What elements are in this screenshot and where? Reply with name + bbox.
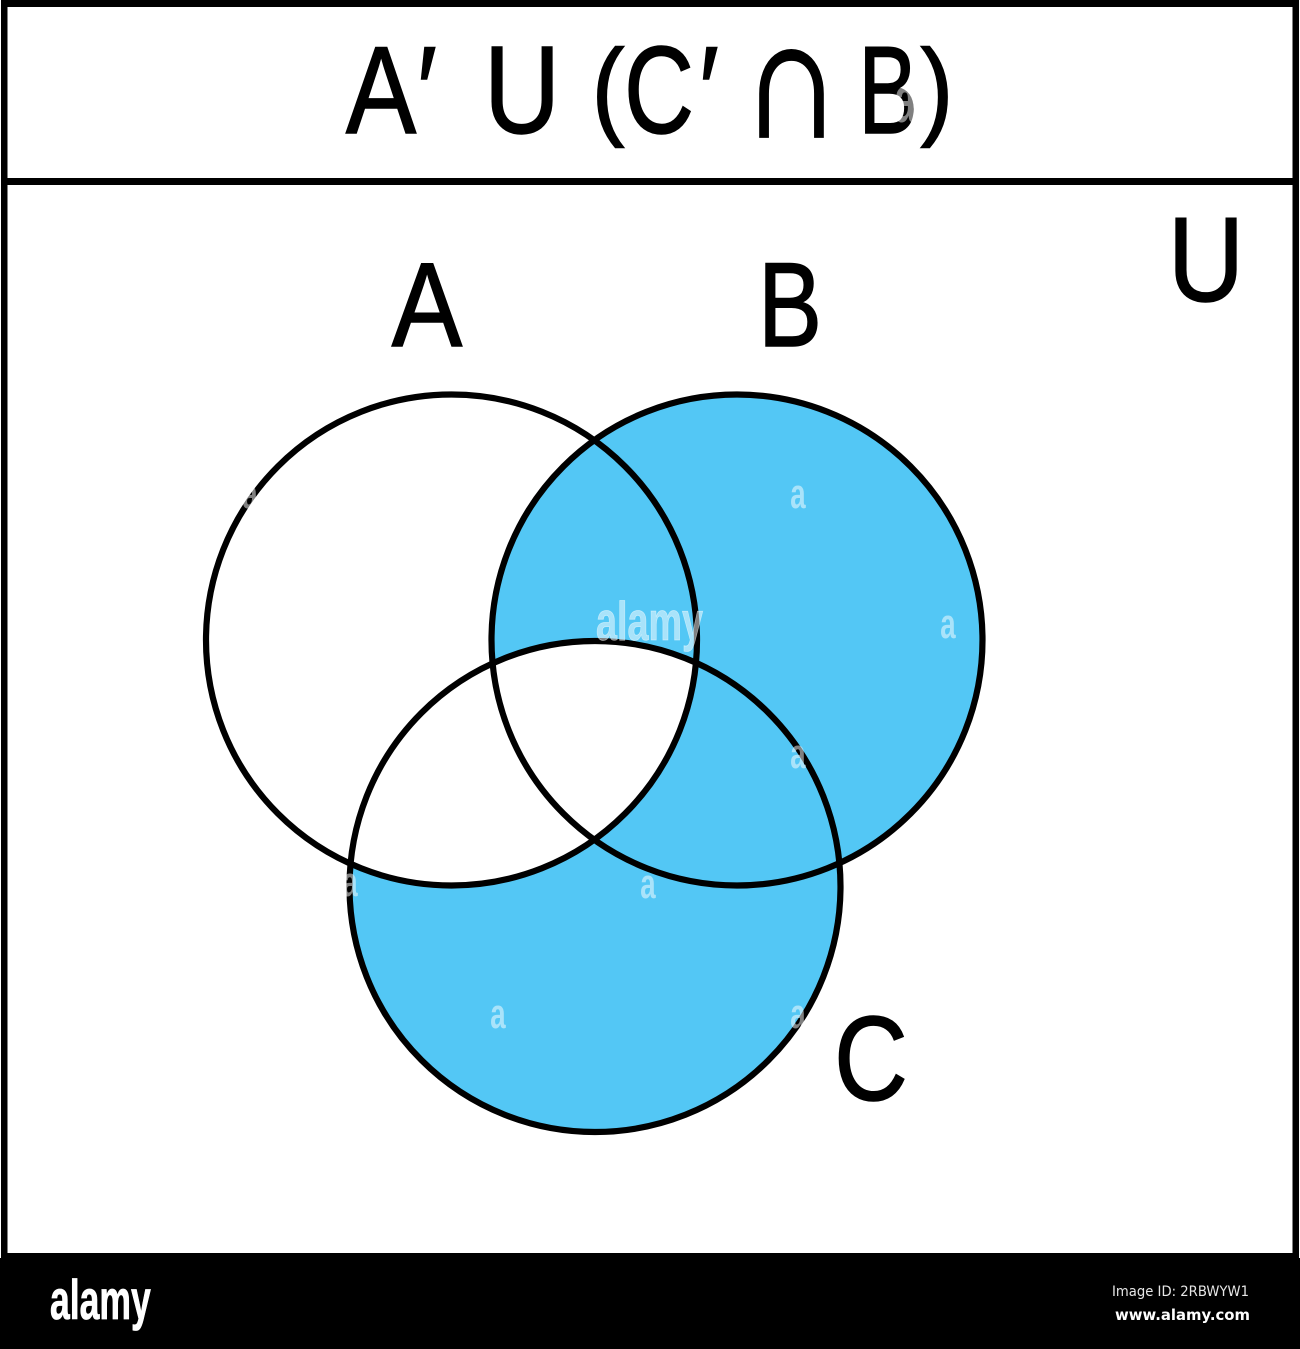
circle outline A — [206, 394, 697, 886]
watermark marks: a — [894, 63, 917, 137]
watermark marks — [242, 63, 957, 1037]
venn diagram — [206, 394, 982, 1132]
set label C: C — [834, 991, 908, 1126]
watermark marks: a — [490, 990, 507, 1037]
shaded region: set B — [492, 394, 982, 886]
title: ) — [921, 26, 953, 148]
website: www.alamy.com — [1115, 1306, 1250, 1324]
watermark marks: a — [242, 470, 259, 517]
circle outline C — [350, 641, 840, 1132]
title: ( — [592, 26, 624, 148]
watermark marks: a — [790, 470, 807, 517]
title: U — [484, 22, 560, 160]
set label A: A — [392, 238, 463, 371]
watermark marks: alamy — [596, 590, 703, 652]
watermark marks: a — [640, 860, 657, 907]
footer bar — [0, 1258, 1300, 1349]
title: B — [858, 21, 918, 159]
title — [346, 0, 953, 172]
unshaded region: A and C overlap — [354, 644, 693, 882]
watermark marks: a — [790, 730, 807, 777]
header divider — [4, 178, 1296, 185]
title: ′ — [699, 22, 719, 160]
footer logo: alamy — [50, 1269, 151, 1331]
circle outline B — [492, 394, 982, 886]
shaded region: set C — [350, 641, 840, 1132]
set label U: U — [1168, 193, 1244, 326]
watermark marks: a — [790, 990, 807, 1037]
title: C — [624, 20, 694, 160]
image id: Image ID: 2RBWYW1 — [1112, 1284, 1249, 1300]
title: ′ — [417, 22, 437, 160]
watermark marks: a — [940, 600, 957, 647]
set label B: B — [758, 239, 822, 373]
watermark marks: a — [342, 858, 359, 905]
title: A — [346, 22, 416, 160]
